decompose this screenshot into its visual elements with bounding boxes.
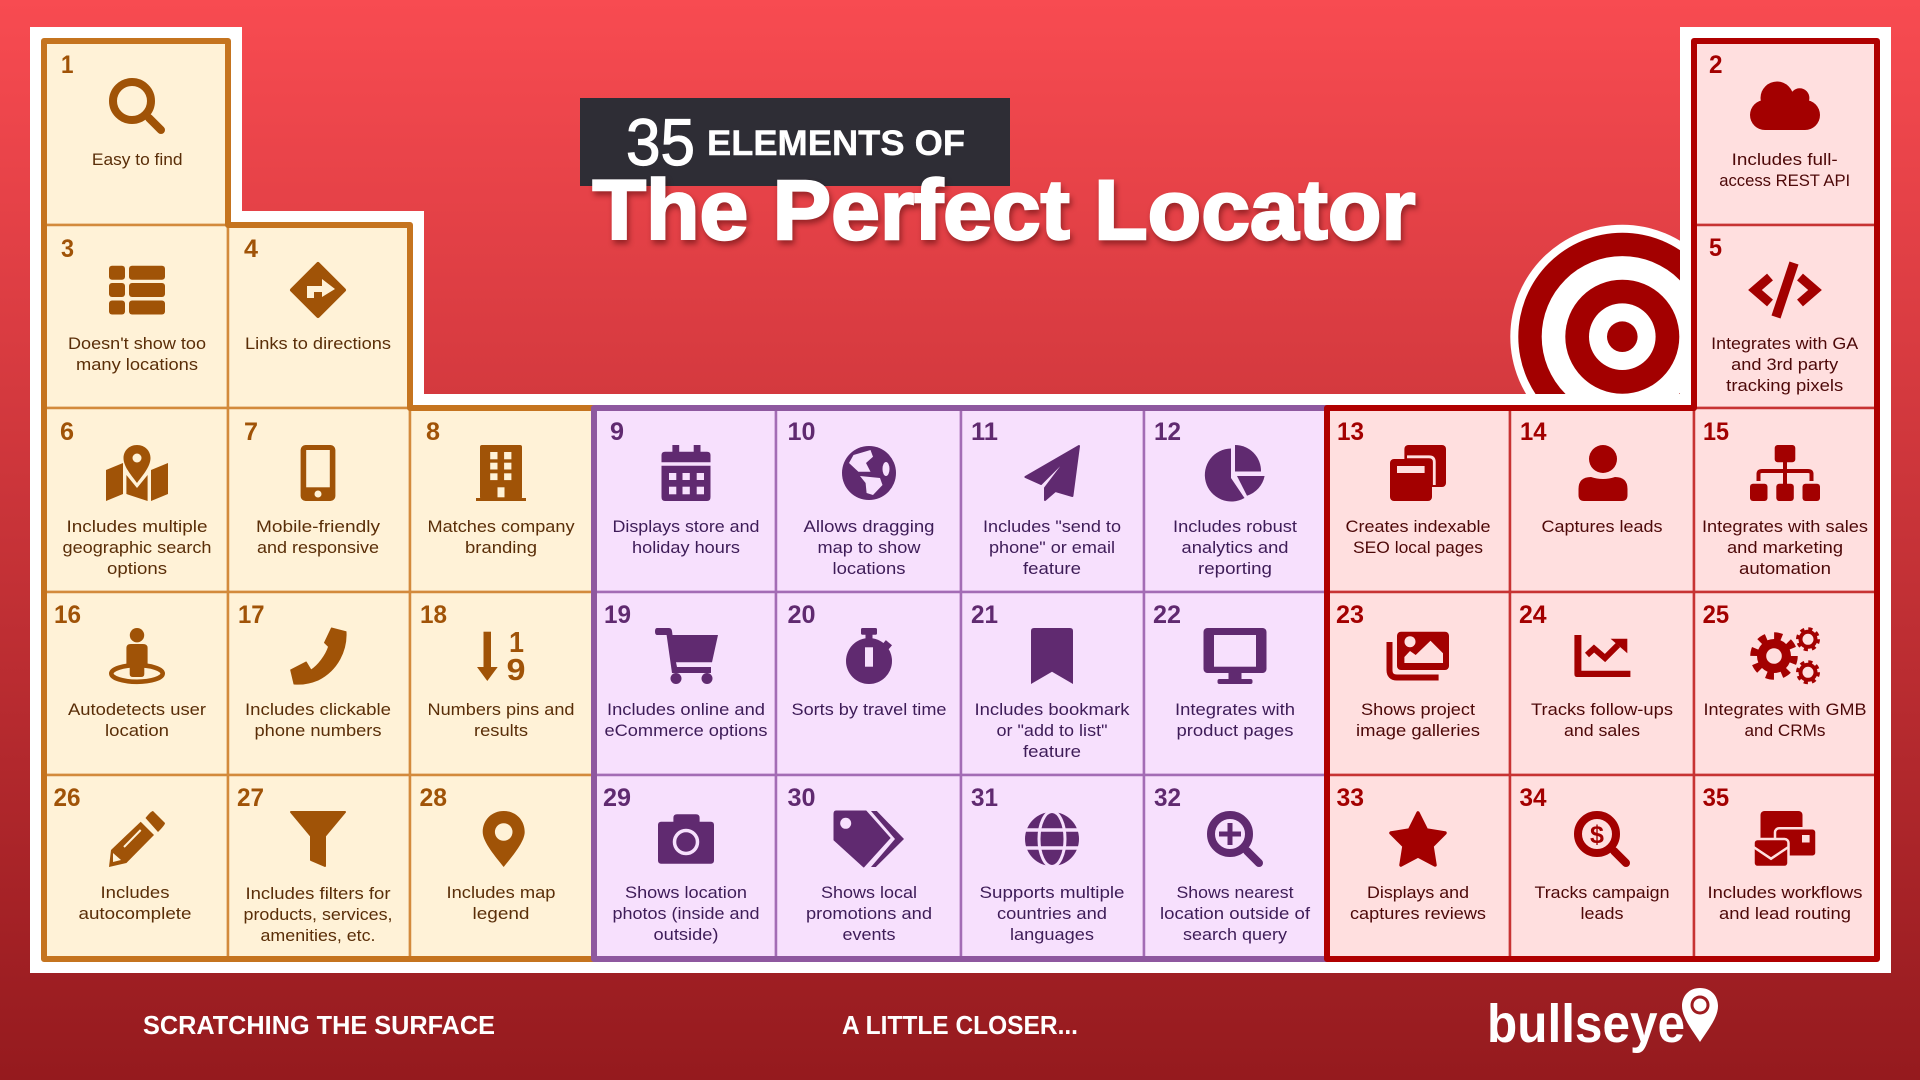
icon: star [1391,813,1445,865]
icon: numeric sort: 1 [509,627,524,659]
cell 32: Shows nearest location outside of search query: 32 [1154,784,1181,812]
cell 26: Includes autocomplete [44,775,228,959]
cell 13: Creates indexable SEO local pages: SEO local pages [1353,538,1483,557]
panel: purple group, a little closer [594,408,1327,959]
cell 15: Integrates with sales and marketing automation: automation [1739,559,1831,578]
panel: orange group, scratching the surface [44,41,594,959]
cell 5: Integrates with GA and 3rd party tracking pixels [1694,225,1877,408]
cell 29: Shows location photos (inside and outside) [594,775,776,959]
cell 6: Includes multiple geographic search options: 6 [60,418,74,446]
icon: person on location ring [111,628,163,682]
cell 18: Numbers pins and results [410,592,594,775]
cell 1: Easy to find [44,41,228,225]
cell 35: Includes workflows and lead routing [1694,775,1877,959]
cell 14: Captures leads: Captures leads [1542,517,1662,536]
cell 6: Includes multiple geographic search options: Includes multiple [66,517,208,536]
cell 23: Shows project image galleries: Shows project [1361,700,1475,719]
cell 22: Integrates with product pages: Integrates with [1175,700,1295,719]
cell 33: Displays and captures reviews: 33 [1336,784,1364,812]
cell 1: Easy to find: Easy to find [92,150,182,169]
cell 8: Matches company branding [410,408,594,592]
cell 28: Includes map legend [410,775,594,959]
cell 15: Integrates with sales and marketing automation [1694,408,1877,592]
cell 5: Integrates with GA and 3rd party tracking pixels: Integrates with GA [1711,334,1859,353]
cell 13: Creates indexable SEO local pages [1327,408,1510,592]
cell 29: Shows location photos (inside and outside): outside) [654,925,718,944]
icon: lead routing envelope [1754,811,1816,867]
cell 22: Integrates with product pages [1144,592,1327,775]
cell 10: Allows dragging map to show locations [776,408,961,592]
cell 27: Includes filters for products, services, amenities, etc.: amenities, etc. [260,926,376,945]
cell 35: Includes workflows and lead routing: Includes workflows [1708,883,1862,902]
cell 4: Links to directions: 4 [244,235,258,263]
cell 16: Autodetects user location [44,592,228,775]
cell 12: Includes robust analytics and reporting: analytics and [1182,538,1288,557]
icon: user [1578,445,1628,501]
cell 25: Integrates with GMB and CRMs: 25 [1703,601,1729,629]
cell 31: Supports multiple countries and languages: 31 [971,784,998,812]
cell 2: Includes full-access REST API: Includes full- [1732,150,1838,169]
cell 3: Doesn't show too many locations: Doesn't show too [68,334,206,353]
icon: office building [476,445,526,501]
cell 33: Displays and captures reviews [1327,775,1510,959]
cell 16: Autodetects user location: location [105,721,169,740]
icon: funnel [291,812,345,866]
cell 24: Tracks follow-ups and sales: Tracks follow-ups [1531,700,1673,719]
cell 9: Displays store and holiday hours: Displays store and [612,517,760,536]
cell 17: Includes clickable phone numbers: 17 [238,601,264,629]
icon: smartphone [301,445,335,501]
cell 28: Includes map legend: 28 [420,784,447,812]
icon: map pin [483,811,525,867]
cell 12: Includes robust analytics and reporting: 12 [1154,418,1181,446]
cell 31: Supports multiple countries and languages: Supports multiple [980,883,1124,902]
cell 11: Includes send to phone or email feature: feature [1023,559,1081,578]
icon: pie chart [1205,445,1265,501]
cell 27: Includes filters for products, services, amenities, etc.: products, services, [244,905,392,924]
icon: code brackets [1755,263,1815,317]
icon: photo gallery [1390,632,1449,678]
cell 33: Displays and captures reviews: Displays and [1367,883,1469,902]
icon: map with pin [106,445,168,501]
cell 12: Includes robust analytics and reporting: Includes robust [1173,517,1297,536]
cell 29: Shows location photos (inside and outside): 29 [603,784,631,812]
cell 17: Includes clickable phone numbers: phone numbers [254,721,382,740]
cell 12: Includes robust analytics and reporting: reporting [1198,559,1272,578]
cell 25: Integrates with GMB and CRMs [1694,592,1877,775]
icon: bullseye target [1510,225,1734,449]
icon: pencil [109,811,165,867]
cell 27: Includes filters for products, services, amenities, etc.: Includes filters for [246,884,391,903]
cell 16: Autodetects user location: Autodetects user [68,700,206,719]
cell 24: Tracks follow-ups and sales: 24 [1519,601,1547,629]
icon: calendar [662,445,710,501]
cell 32: Shows nearest location outside of search query [1144,775,1327,959]
cell 9: Displays store and holiday hours: holiday hours [632,538,740,557]
cell 8: Matches company branding: branding [465,538,537,557]
cell 31: Supports multiple countries and languages: languages [1010,925,1094,944]
icon: list table [109,266,165,314]
footer label: a little closer: A LITTLE CLOSER... [842,1010,1078,1040]
cell 18: Numbers pins and results: Numbers pins and [428,700,574,719]
cell 7: Mobile-friendly and responsive: 7 [244,418,258,446]
cell 19: Includes online and eCommerce options: 19 [604,601,631,629]
cell 32: Shows nearest location outside of search query: location outside of [1160,904,1310,923]
cell 25: Integrates with GMB and CRMs: and CRMs [1744,721,1826,740]
cell 28: Includes map legend: Includes map [446,883,556,902]
icon: paper plane [1025,446,1079,500]
cell 26: Includes autocomplete: autocomplete [78,904,192,923]
cell 19: Includes online and eCommerce options: eCommerce options [604,721,768,740]
cell 30: Shows local promotions and events: events [842,925,896,944]
icon: zoom in magnifier [1211,815,1259,863]
cell 30: Shows local promotions and events: Shows local [821,883,917,902]
icon: gears [1754,629,1818,682]
icon: earth globe [842,446,896,500]
title block: 35 [626,105,695,179]
cell 18: Numbers pins and results: results [474,721,528,740]
cell 30: Shows local promotions and events: 30 [788,784,816,812]
cell 4: Links to directions: Links to directions [245,334,391,353]
icon: bookmark [1031,628,1073,684]
icon: computer monitor [1204,628,1266,684]
cell 20: Sorts by travel time: Sorts by travel time [792,700,946,719]
panel: red group, bullseye [1327,41,1877,959]
cell 3: Doesn't show too many locations: 3 [61,235,74,263]
cell 34: Tracks campaign leads [1510,775,1694,959]
icon: numeric sort [477,627,526,687]
cell 2: Includes full-access REST API [1694,41,1877,225]
cell 30: Shows local promotions and events [776,775,961,959]
cell 18: Numbers pins and results: 18 [420,601,447,629]
title block: The Perfect Locator [592,163,1416,257]
cell 5: Integrates with GA and 3rd party tracking pixels: and 3rd party [1731,355,1839,374]
icon: world grid [1024,812,1080,866]
cell 19: Includes online and eCommerce options: Includes online and [607,700,765,719]
cell 31: Supports multiple countries and languages: countries and [997,904,1107,923]
cell 14: Captures leads [1510,408,1694,592]
cell 31: Supports multiple countries and languages [961,775,1144,959]
cell 15: Integrates with sales and marketing automation: Integrates with sales [1702,517,1868,536]
cell 5: Integrates with GA and 3rd party tracking pixels: tracking pixels [1726,376,1843,395]
icon: line chart [1574,635,1630,677]
cell 15: Integrates with sales and marketing automation: 15 [1703,418,1729,446]
cell 2: Includes full-access REST API: 2 [1709,51,1722,79]
cell 8: Matches company branding: 8 [426,418,440,446]
logo: bullseye: bullseye [1487,994,1685,1054]
border: orange group outline [44,41,594,959]
cell 14: Captures leads: 14 [1520,418,1547,446]
border: purple group outline [594,408,1327,959]
cell 30: Shows local promotions and events: promotions and [806,904,932,923]
cell 33: Displays and captures reviews: captures reviews [1350,904,1486,923]
cell 10: Allows dragging map to show locations: locations [832,559,906,578]
cell 21: Includes bookmark or add to list feature: or "add to list" [996,721,1108,740]
cell 22: Integrates with product pages: 22 [1153,601,1181,629]
cell 27: Includes filters for products, services, amenities, etc. [228,775,410,959]
icon: phone handset [291,628,346,684]
icon: camera [658,814,714,864]
icon: stopwatch [846,628,892,684]
title block: ELEMENTS OF [707,124,965,163]
cell 17: Includes clickable phone numbers: Includes clickable [245,700,391,719]
cell 21: Includes bookmark or add to list feature [961,592,1144,775]
border: red group outline [1327,41,1877,959]
cell 8: Matches company branding: Matches company [428,517,575,536]
cell 9: Displays store and holiday hours [594,408,776,592]
cell 16: Autodetects user location: 16 [54,601,81,629]
cell 22: Integrates with product pages: product pages [1176,721,1294,740]
cell 11: Includes send to phone or email feature: Includes "send to [983,517,1121,536]
cell 10: Allows dragging map to show locations: 10 [788,418,816,446]
cell 7: Mobile-friendly and responsive: and responsive [257,538,379,557]
cell 7: Mobile-friendly and responsive: Mobile-friendly [256,517,381,536]
cell 11: Includes send to phone or email feature [961,408,1144,592]
cell 15: Integrates with sales and marketing automation: and marketing [1727,538,1843,557]
icon: magnifier [113,82,161,130]
cell 24: Tracks follow-ups and sales: and sales [1564,721,1640,740]
cell 32: Shows nearest location outside of search query: search query [1183,925,1288,944]
cell 6: Includes multiple geographic search options: geographic search [62,538,212,557]
cell 13: Creates indexable SEO local pages: Creates indexable [1346,517,1490,536]
cell 17: Includes clickable phone numbers [228,592,410,775]
cell 12: Includes robust analytics and reporting [1144,408,1327,592]
cell 35: Includes workflows and lead routing: and lead routing [1719,904,1851,923]
cell 9: Displays store and holiday hours: 9 [610,418,624,446]
cell 6: Includes multiple geographic search options [44,408,228,592]
cell 29: Shows location photos (inside and outside): Shows location [625,883,747,902]
icon: shopping cart [655,628,718,684]
cell 32: Shows nearest location outside of search query: Shows nearest [1176,883,1294,902]
cell 21: Includes bookmark or add to list feature: feature [1023,742,1081,761]
cell 26: Includes autocomplete: Includes [100,883,170,902]
cell 3: Doesn't show too many locations [44,225,228,408]
icon: dollar magnifier: $ [1590,821,1604,849]
icon: direction sign [292,264,344,316]
cell 1: Easy to find: 1 [61,51,74,79]
icon: numeric sort: 9 [506,652,526,687]
cell 7: Mobile-friendly and responsive [228,408,410,592]
cell 23: Shows project image galleries [1327,592,1510,775]
cell 34: Tracks campaign leads: 34 [1520,784,1547,812]
cell 34: Tracks campaign leads: Tracks campaign [1534,883,1670,902]
icon: cloud [1750,82,1820,130]
cell 29: Shows location photos (inside and outside): photos (inside and [612,904,760,923]
cell 27: Includes filters for products, services, amenities, etc.: 27 [237,784,264,812]
cell 23: Shows project image galleries: 23 [1336,601,1364,629]
cell 21: Includes bookmark or add to list feature: 21 [971,601,998,629]
icon: stacked documents [1390,445,1446,501]
cell 2: Includes full-access REST API: access REST API [1719,171,1850,190]
cell 26: Includes autocomplete: 26 [54,784,80,812]
icon: dollar magnifier [1578,815,1626,863]
cell 34: Tracks campaign leads: leads [1580,904,1624,923]
cell 4: Links to directions [228,225,410,408]
cell 23: Shows project image galleries: image galleries [1356,721,1480,740]
cell 19: Includes online and eCommerce options [594,592,776,775]
cell 24: Tracks follow-ups and sales [1510,592,1694,775]
cell 35: Includes workflows and lead routing: 35 [1703,784,1729,812]
cell 13: Creates indexable SEO local pages: 13 [1337,418,1364,446]
cell 6: Includes multiple geographic search options: options [107,559,167,578]
cell 5: Integrates with GA and 3rd party tracking pixels: 5 [1709,234,1722,262]
icon: org chart [1750,445,1820,501]
cell 3: Doesn't show too many locations: many locations [76,355,198,374]
cell 10: Allows dragging map to show locations: Allows dragging [804,517,934,536]
cell 20: Sorts by travel time: 20 [788,601,816,629]
cell 11: Includes send to phone or email feature: 11 [971,418,998,446]
cell 10: Allows dragging map to show locations: map to show [818,538,921,557]
cell 11: Includes send to phone or email feature: phone" or email [989,538,1115,557]
footer label: scratching the surface: SCRATCHING THE SURFACE [143,1010,495,1040]
icon: price tags [834,811,904,867]
cell 25: Integrates with GMB and CRMs: Integrates with GMB [1704,700,1866,719]
title block [580,98,1416,257]
cell 28: Includes map legend: legend [472,904,530,923]
cell 20: Sorts by travel time [776,592,961,775]
cell 21: Includes bookmark or add to list feature: Includes bookmark [974,700,1130,719]
